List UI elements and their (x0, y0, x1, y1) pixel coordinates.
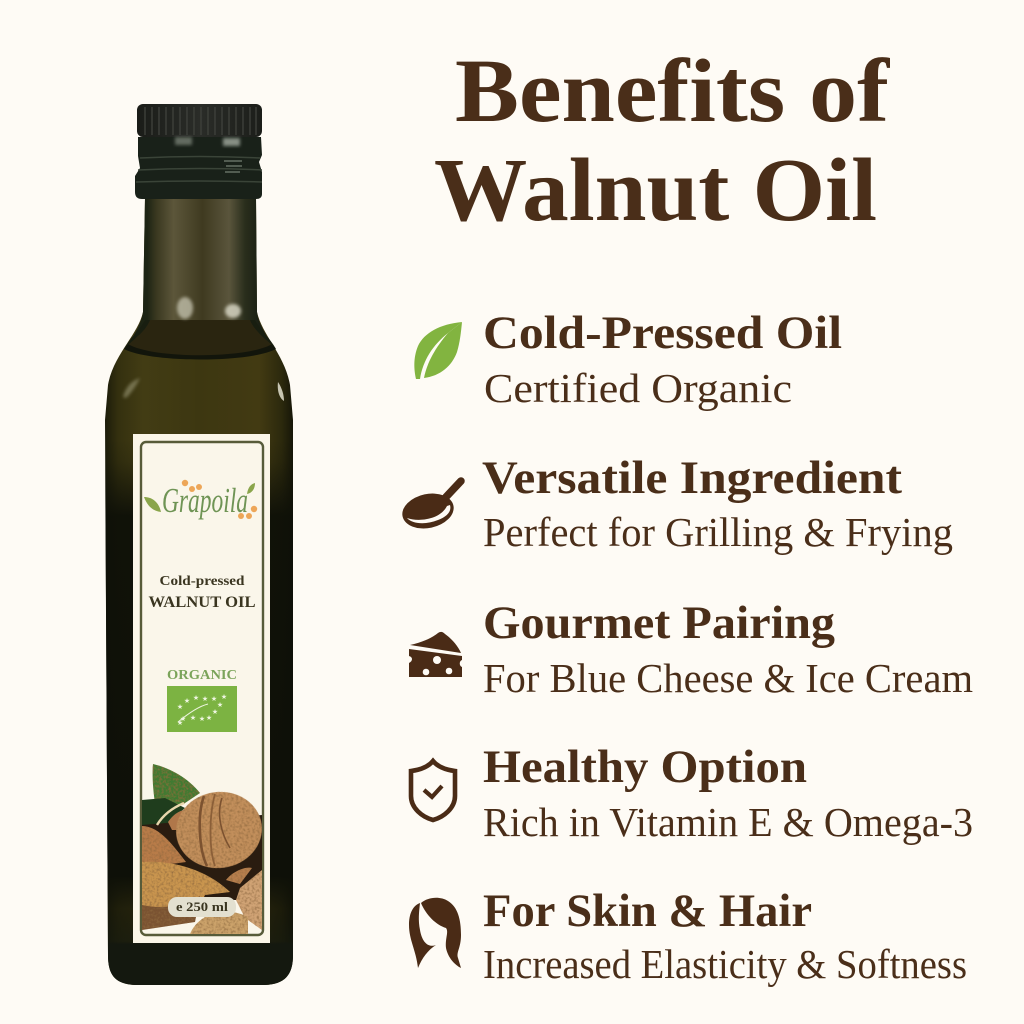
organic mark: ★ (177, 719, 183, 727)
benefit: versatile ingredient (399, 452, 953, 555)
organic mark: ORGANIC (167, 668, 237, 683)
text (483, 885, 967, 987)
bottle (105, 104, 293, 985)
label text: product name: Cold-pressed (160, 574, 245, 589)
label text: product name (148, 574, 256, 611)
text (483, 307, 842, 411)
bottle oil line (128, 320, 272, 356)
icon: woman hair profile (409, 898, 461, 968)
text (483, 741, 973, 845)
volume pill: e 250 ml (176, 899, 228, 914)
text: Cold-Pressed Oil (483, 307, 842, 359)
text: Increased Elasticity & Softness (483, 941, 967, 987)
benefit: healthy option (411, 741, 973, 845)
brand logo: Grapoila: Grapoila (162, 481, 248, 520)
organic mark: ★ (211, 695, 217, 703)
organic mark: ★ (193, 694, 199, 702)
text: Healthy Option (483, 741, 807, 793)
organic mark (167, 668, 237, 732)
organic mark: ★ (184, 697, 190, 705)
text: For Blue Cheese & Ice Cream (483, 655, 973, 701)
organic mark: ★ (177, 703, 183, 711)
benefit: gourmet pairing (409, 597, 973, 701)
icon: shield check (411, 761, 455, 820)
organic mark: ★ (206, 714, 212, 722)
text: For Skin & Hair (483, 885, 812, 937)
organic mark: ★ (202, 695, 208, 703)
bottle label (133, 434, 270, 943)
benefit: for skin and hair (409, 885, 967, 987)
organic mark: ★ (199, 715, 205, 723)
bottle cap (135, 104, 262, 199)
text: Versatile Ingredient (482, 452, 902, 504)
icon: cheese wedge (409, 632, 462, 677)
title: Benefits of (455, 42, 890, 141)
text: Certified Organic (484, 365, 792, 411)
icon: leaf (414, 322, 462, 379)
text: Rich in Vitamin E & Omega-3 (483, 799, 973, 845)
label text: product name: WALNUT OIL (148, 594, 256, 611)
bottle neck glass (134, 198, 266, 335)
walnut illustration (142, 764, 267, 934)
benefit: cold-pressed oil (414, 307, 842, 411)
bottle glass body (105, 198, 293, 985)
organic mark: ★ (180, 715, 186, 723)
organic mark: ★ (221, 693, 227, 701)
text: Gourmet Pairing (483, 597, 835, 649)
title: Walnut Oil (434, 141, 877, 240)
organic mark: ★ (217, 701, 223, 709)
bottle dark lower band (105, 440, 293, 985)
title (434, 42, 890, 240)
text: Perfect for Grilling & Frying (483, 509, 953, 555)
organic mark: ★ (212, 708, 218, 716)
brand logo: Grapoila (144, 480, 257, 520)
text (482, 452, 953, 555)
volume pill (168, 897, 236, 917)
organic mark: ★ (190, 714, 196, 722)
text (483, 597, 973, 701)
icon: frying pan (399, 481, 461, 533)
